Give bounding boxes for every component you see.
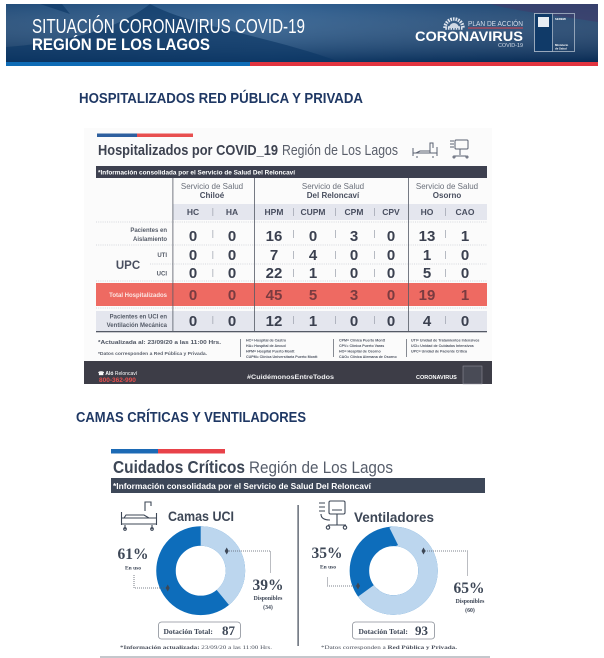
row: ventilacion mecanica: 0 (387, 313, 395, 330)
header logo: ministerio de salud: SEREMI (555, 17, 566, 21)
row: total hospitalizados: 0 (189, 287, 197, 304)
service headers: Chiloé (200, 191, 225, 200)
row: total hospitalizados: 45 (266, 287, 282, 304)
row: total hospitalizados: 5 (309, 287, 317, 304)
panel: cuidados criticos (100, 449, 490, 658)
connector: ventiladores (328, 551, 468, 586)
heading: hospitalizados: HOSPITALIZADOS RED PÚBLICA Y PRIVADA (79, 89, 363, 107)
row: ventilacion mecanica: 12 (266, 313, 282, 330)
bottom rule (100, 656, 490, 658)
row: UCI: 0 (461, 265, 469, 282)
info bar (111, 478, 485, 493)
row dotted lines (96, 222, 487, 308)
stat: 39% disponibles: 39% (252, 577, 284, 594)
row labels: UTI (157, 253, 167, 259)
panel subtitle region: Región de Los Lagos (249, 458, 393, 477)
row: pacientes en aislamiento: 0 (189, 228, 197, 245)
stat: 39% disponibles: Disponibles (254, 596, 283, 602)
row labels: Ventilación Mecánica (107, 323, 168, 329)
header banner (6, 4, 598, 66)
row: UCI: 0 (189, 265, 197, 282)
column header band: HC (187, 207, 199, 217)
stat: 35% en uso: En uso (320, 564, 336, 570)
row labels: Aislamiento (133, 237, 167, 243)
dotacion total uci: Dotación Total: (164, 627, 213, 636)
footer band (84, 361, 492, 384)
dotacion total uci: 87 (222, 623, 236, 638)
icon: hospital bed (122, 502, 156, 530)
stat: 35% en uso (312, 545, 342, 570)
header logo: ministerio de salud: Ministerio (555, 43, 569, 47)
row: UTI: 0 (461, 247, 469, 264)
stat: 61% en uso: 61% (118, 546, 148, 563)
row: pacientes en aislamiento: 0 (387, 228, 395, 245)
ventilation row band (96, 311, 487, 331)
ventiladores title: Ventiladores (354, 509, 434, 525)
footer band: 800-362-990 (99, 377, 136, 384)
row labels: UCI (157, 272, 167, 278)
row: UTI: 7 (270, 247, 278, 264)
row: pacientes en aislamiento (189, 228, 469, 245)
stat: 35% en uso: 35% (312, 545, 342, 562)
row: pacientes en aislamiento: 13 (419, 228, 435, 245)
column header band: HO (421, 207, 434, 217)
update notes: *Datos corresponden a Red Pública y Privada. (98, 351, 207, 356)
row: ventilacion mecanica: 0 (350, 313, 358, 330)
row: ventilacion mecanica: 1 (309, 313, 317, 330)
row: ventilacion mecanica: 0 (189, 313, 197, 330)
dotacion total uci (158, 622, 240, 639)
stat: 61% en uso (118, 546, 148, 572)
connector: uci (134, 551, 270, 588)
donut chart: ventiladores (359, 536, 428, 605)
header title (32, 15, 305, 54)
update notes: *Actualizada al: 23/09/20 a las 11:00 Hrs. (98, 340, 221, 346)
accent bar (97, 134, 193, 137)
row: UTI: 0 (189, 247, 197, 264)
row: total hospitalizados: 19 (419, 287, 435, 304)
service headers: Osorno (433, 191, 461, 200)
row: ventilacion mecanica: 0 (228, 313, 236, 330)
stat: 65% disponibles: (60) (465, 607, 475, 614)
row labels (107, 228, 168, 329)
header title: SITUACIÓN CORONAVIRUS COVID-19 (32, 15, 305, 38)
row: ventilacion mecanica: 0 (461, 313, 469, 330)
row: UCI: 0 (350, 265, 358, 282)
stat: 39% disponibles (252, 577, 284, 611)
header logo: plan de accion coronavirus: COVID-19 (498, 43, 523, 49)
row: ventilacion mecanica (189, 313, 469, 330)
legend: UPC= Unidad de Paciente Crítica (411, 350, 468, 354)
row labels: Pacientes en UCI en (110, 314, 167, 320)
markers: ventiladores (356, 548, 426, 590)
row: UTI: 4 (309, 247, 318, 264)
heading: camas criticas: CAMAS CRÍTICAS Y VENTILADORES (76, 409, 306, 426)
row: pacientes en aislamiento: 1 (461, 228, 469, 245)
legend: CUPM= Clínica Universitaria Puerto Montt (246, 355, 318, 359)
column header band: CPM (345, 207, 363, 217)
row: total hospitalizados (189, 287, 469, 304)
row: UCI (189, 265, 469, 282)
stat: 65% disponibles: Disponibles (456, 599, 485, 605)
row: UTI (189, 247, 469, 264)
service headers: Del Reloncaví (307, 191, 360, 200)
legend: CAO= Clínica Alemana de Osorno (339, 355, 397, 359)
column header band: HPM (265, 207, 283, 217)
row: UCI: 0 (228, 265, 236, 282)
info bar: *Información consolidada por el Servicio de Salud Del Reloncaví (113, 482, 372, 491)
accent bar (111, 449, 225, 454)
header logo: ministerio de salud: de Salud (555, 46, 567, 50)
info bar (96, 166, 487, 178)
divider (298, 505, 299, 646)
row: total hospitalizados: 0 (228, 287, 236, 304)
row: UCI: 5 (423, 265, 431, 282)
header logo: plan de accion coronavirus (415, 19, 523, 49)
column header band: CUPM (300, 207, 326, 217)
row: total hospitalizados: 1 (461, 287, 469, 304)
row: UCI: 1 (309, 265, 317, 282)
column header band: CAO (456, 207, 475, 217)
dotacion total ventiladores: 93 (415, 623, 428, 638)
dotacion total ventiladores: Dotación Total: (358, 627, 408, 636)
panel: hospitalizados por covid-19 (84, 128, 492, 384)
camas uci title: Camas UCI (168, 508, 234, 524)
footer band: #CuidémonosEntreTodos (247, 374, 334, 381)
service headers: Servicio de Salud (416, 182, 478, 191)
row: pacientes en aislamiento: 3 (350, 228, 358, 245)
cell tick marks (212, 230, 446, 324)
info bar: *Información consolidada por el Servicio de Salud Del Reloncaví (98, 170, 295, 176)
row: ventilacion mecanica: 4 (423, 313, 432, 330)
row: UTI: 1 (423, 247, 431, 264)
footnote ventiladores: *Datos corresponden a Red Pública y Privada. (321, 645, 458, 651)
panel title: Hospitalizados por COVID_19 (98, 142, 278, 159)
legend: HA= Hospital de Ancud (246, 344, 286, 348)
icon: ventilator (319, 501, 347, 529)
legend: UTI= Unidad de Tratamientos Intensivos (411, 338, 479, 342)
row: UTI: 0 (387, 247, 395, 264)
header logo: ministerio de salud (534, 14, 574, 52)
stat: 65% disponibles: 65% (454, 580, 484, 597)
legend: CPM= Clínica Puerto Montt (339, 338, 386, 342)
row labels: Pacientes en (130, 228, 167, 234)
column header band: HA (226, 207, 238, 217)
donut chart: camas uci (166, 536, 235, 605)
row: UCI: 0 (387, 265, 395, 282)
legend (240, 338, 479, 359)
table column dividers (96, 178, 487, 332)
row: pacientes en aislamiento: 0 (309, 228, 317, 245)
header logo: plan de accion coronavirus: CORONAVIRUS (415, 29, 523, 44)
legend: HC= Hospital de Castro (246, 338, 287, 342)
row: pacientes en aislamiento: 0 (228, 228, 236, 245)
footer band: ☎ Aló Reloncaví (98, 371, 138, 377)
row labels: Total Hospitalizados (109, 293, 168, 299)
row: pacientes en aislamiento: 16 (266, 228, 282, 245)
legend: HO= Hospital de Osorno (339, 350, 381, 354)
legend: HPM= Hospital Puerto Montt (246, 350, 295, 354)
header title: REGIÓN DE LOS LAGOS (32, 35, 210, 54)
header logo: plan de accion coronavirus: PLAN DE ACCIÓN (468, 19, 523, 28)
service headers: Servicio de Salud (302, 182, 364, 191)
row: total hospitalizados: 3 (350, 287, 358, 304)
row: total hospitalizados: 0 (387, 287, 395, 304)
row labels: UPC (116, 260, 140, 272)
stat: 65% disponibles (454, 580, 485, 614)
stat: 39% disponibles: (34) (263, 604, 273, 611)
panel subtitle region: Región de Los Lagos (282, 143, 398, 159)
row: UTI: 0 (350, 247, 358, 264)
column header band: CPV (382, 207, 400, 217)
icon: ventilator small (450, 140, 468, 158)
column header band (173, 204, 487, 220)
legend: CPV= Clínica Puerto Varas (339, 344, 384, 348)
update notes (98, 340, 221, 356)
row: UTI: 0 (228, 247, 236, 264)
total row band (96, 283, 487, 306)
footnote uci: *Información actualizada: 23/09/20 a las 11:00 Hrs. (120, 645, 273, 651)
row: UCI: 22 (266, 265, 282, 282)
service headers (181, 182, 478, 200)
footer band: CORONAVIRUS (416, 375, 457, 381)
dotacion total ventiladores (352, 622, 434, 639)
icon: bed small (413, 143, 437, 158)
panel title: Cuidados Críticos (113, 457, 245, 477)
service headers: Servicio de Salud (181, 182, 243, 191)
legend: UCI= Unidad de Cuidados Intensivos (411, 344, 474, 348)
stat: 61% en uso: En uso (125, 566, 141, 572)
markers: uci (166, 548, 229, 592)
